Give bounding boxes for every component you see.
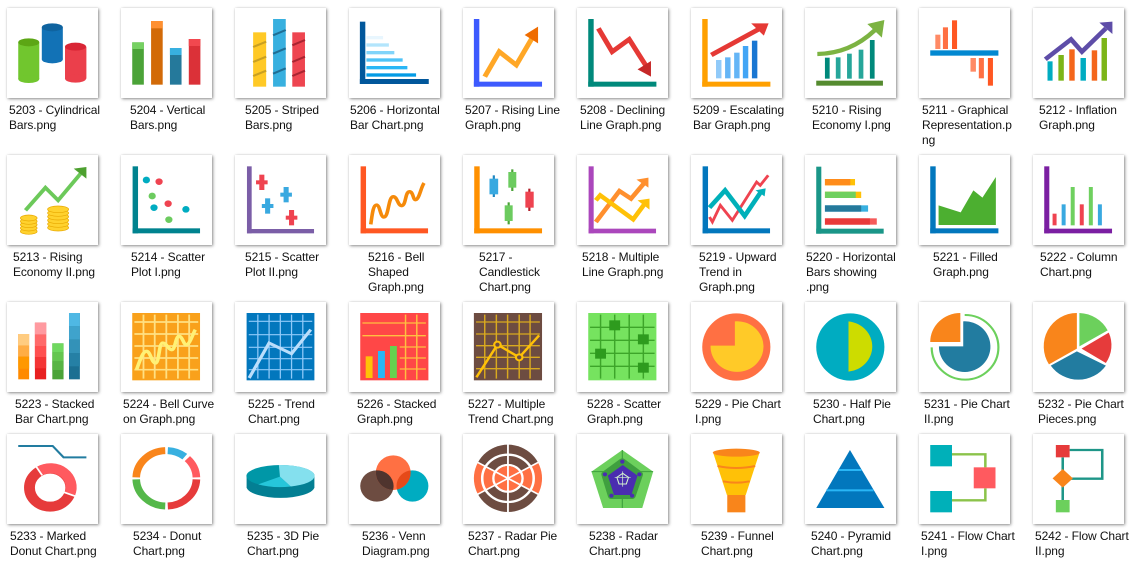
label: 5233: 5233 - Marked (10, 529, 86, 543)
label: 5209: 5209 - Escalating (693, 103, 784, 117)
label: 5231 (924, 397, 1010, 426)
label: 5224 (123, 397, 214, 426)
label: 5205: Bars.png (245, 118, 292, 132)
label: 5205: 5205 - Striped (245, 103, 319, 117)
label: 5204 (130, 103, 205, 132)
label: 5212: Graph.png (1039, 118, 1095, 132)
label: 5239: Chart.png (701, 544, 753, 558)
label: 5214 (131, 250, 205, 279)
label: 5241: I.png (921, 544, 947, 558)
label: 5219: 5219 - Upward (699, 250, 776, 264)
label: 5226: Graph.png (357, 412, 413, 426)
icon: 5242 flow chart II (1033, 434, 1124, 524)
label: 5240: Chart.png (811, 544, 863, 558)
label: 5227 (468, 397, 553, 426)
label: 5206: Bar Chart.png (350, 118, 423, 132)
label: 5226 (357, 397, 436, 426)
label: 5220: .png (806, 280, 829, 294)
icon: 5205 striped bars (235, 8, 326, 98)
label: 5234 (133, 529, 202, 558)
label: 5225 (248, 397, 315, 426)
label: 5204: 5204 - Vertical (130, 103, 205, 117)
label: 5206: 5206 - Horizontal (350, 103, 440, 117)
label: 5218: 5218 - Multiple (582, 250, 659, 264)
label: 5233: Donut Chart.png (10, 544, 97, 558)
label: 5237: 5237 - Radar Pie (468, 529, 557, 543)
icon: 5237 radar pie chart (463, 434, 554, 524)
label: 5234: 5234 - Donut (133, 529, 201, 543)
label: 5231: 5231 - Pie Chart (924, 397, 1010, 411)
icon: 5216 bell shaped graph (349, 155, 440, 245)
label: 5231: II.png (924, 412, 953, 426)
label: 5221: Graph.png (933, 265, 989, 279)
icon: 5218 multiple line graph (577, 155, 668, 245)
icon: 5230 half pie chart (805, 302, 896, 392)
label: 5213: 5213 - Rising (13, 250, 82, 264)
label: 5219: Trend in (699, 265, 742, 279)
icon: 5206 horizontal bar chart (349, 8, 440, 98)
label: 5234: Chart.png (133, 544, 185, 558)
icon: 5222 column chart (1033, 155, 1124, 245)
icon: 5236 venn diagram (349, 434, 440, 524)
label: 5236: 5236 - Venn (362, 529, 426, 543)
label: 5206 (350, 103, 440, 132)
label: 5232 (1038, 397, 1124, 426)
label: 5242: 5242 - Flow Chart (1035, 529, 1129, 543)
label: 5241 (921, 529, 1015, 558)
label: 5216: Graph.png (368, 280, 424, 294)
label: 5207: Graph.png (465, 118, 521, 132)
label: 5236: Diagram.png (362, 544, 430, 558)
label: 5227: 5227 - Multiple (468, 397, 545, 411)
icon: 5229 pie chart I (691, 302, 782, 392)
label: 5232: 5232 - Pie Chart (1038, 397, 1124, 411)
label: 5223 (15, 397, 94, 426)
label: 5228: Graph.png (587, 412, 643, 426)
label: 5203: Bars.png (9, 118, 56, 132)
label: 5227: Trend Chart.png (468, 412, 553, 426)
label: 5220: Bars showing (806, 265, 877, 279)
label: 5212: 5212 - Inflation (1039, 103, 1117, 117)
label: 5207: 5207 - Rising Line (465, 103, 560, 117)
label: 5211: 5211 - Graphical (922, 103, 1008, 117)
label: 5223: 5223 - Stacked (15, 397, 94, 411)
label: 5240 (811, 529, 891, 558)
label: 5211: ng (922, 133, 935, 147)
icon: 5214 scatter plot I (121, 155, 212, 245)
label: 5233 (10, 529, 97, 558)
label: 5239: 5239 - Funnel (701, 529, 774, 543)
label: 5209: Bar Graph.png (693, 118, 770, 132)
label: 5213: Economy II.png (13, 265, 95, 279)
label: 5218 (582, 250, 663, 279)
icon: 5225 trend chart (235, 302, 326, 392)
icon: 5240 pyramid chart (805, 434, 896, 524)
icon: 5217 candlestick chart (463, 155, 554, 245)
label: 5211 (922, 103, 1012, 147)
icon: 5224 bell curve on graph (121, 302, 212, 392)
label: 5230: 5230 - Half Pie (813, 397, 891, 411)
icon: 5238 radar chart (577, 434, 668, 524)
label: 5235 (247, 529, 319, 558)
label: 5228 (587, 397, 661, 426)
label: 5222 (1040, 250, 1117, 279)
label: 5210: 5210 - Rising (812, 103, 881, 117)
label: 5214: Plot I.png (131, 265, 181, 279)
label: 5225: 5225 - Trend (248, 397, 315, 411)
label: 5216 (368, 250, 424, 294)
label: 5241: 5241 - Flow Chart (921, 529, 1015, 543)
label: 5224: 5224 - Bell Curve (123, 397, 214, 411)
label: 5211: Representation.p (922, 118, 1012, 132)
label: 5229: I.png (695, 412, 721, 426)
icon: 5203 cylindrical bars (7, 8, 98, 98)
label: 5235: 5235 - 3D Pie (247, 529, 319, 543)
label: 5225: Chart.png (248, 412, 300, 426)
icon: 5241 flow chart I (919, 434, 1010, 524)
label: 5208: Line Graph.png (580, 118, 661, 132)
icon: 5204 vertical bars (121, 8, 212, 98)
label: 5214: 5214 - Scatter (131, 250, 205, 264)
label: 5236 (362, 529, 430, 558)
icon: 5212 inflation graph (1033, 8, 1124, 98)
label: 5232: Pieces.png (1038, 412, 1096, 426)
icon: 5235 3D pie chart (235, 434, 326, 524)
label: 5217 (479, 250, 540, 294)
label: 5217: Candlestick (479, 265, 540, 279)
label: 5222: 5222 - Column (1040, 250, 1117, 264)
label: 5226: 5226 - Stacked (357, 397, 436, 411)
label: 5238: 5238 - Radar (589, 529, 658, 543)
label: 5212 (1039, 103, 1117, 132)
label: 5217: 5217 - (479, 250, 512, 264)
label: 5215: 5215 - Scatter (245, 250, 319, 264)
label: 5209 (693, 103, 784, 132)
label: 5222: Chart.png (1040, 265, 1092, 279)
label: 5218: Line Graph.png (582, 265, 663, 279)
icon: 5227 multiple trend chart (463, 302, 554, 392)
label: 5229: 5229 - Pie Chart (695, 397, 781, 411)
label: 5204: Bars.png (130, 118, 177, 132)
icon: 5219 upward trend in graph (691, 155, 782, 245)
label: 5216: 5216 - Bell (368, 250, 424, 264)
icon: 5213 rising economy II (7, 155, 98, 245)
icon: 5226 stacked graph (349, 302, 440, 392)
label: 5208: 5208 - Declining (580, 103, 665, 117)
label: 5220 (806, 250, 896, 294)
icon: 5210 rising economy I (805, 8, 896, 98)
label: 5220: 5220 - Horizontal (806, 250, 896, 264)
label: 5235: Chart.png (247, 544, 299, 558)
label: 5237 (468, 529, 557, 558)
label: 5210 (812, 103, 891, 132)
icon: 5232 pie chart pieces (1033, 302, 1124, 392)
label: 5215 (245, 250, 319, 279)
icon: 5228 scatter graph (577, 302, 668, 392)
icon: 5207 rising line graph (463, 8, 554, 98)
label: 5219: Graph.png (699, 280, 755, 294)
label: 5203: 5203 - Cylindrical (9, 103, 100, 117)
label: 5230 (813, 397, 891, 426)
icon: 5211 graphical representation (919, 8, 1010, 98)
label: 5240: 5240 - Pyramid (811, 529, 891, 543)
label: 5242: II.png (1035, 544, 1064, 558)
label: 5224: on Graph.png (123, 412, 195, 426)
icon: 5239 funnel chart (691, 434, 782, 524)
label: 5242 (1035, 529, 1129, 558)
icon: 5220 horizontal bars showing (805, 155, 896, 245)
icon: 5221 filled graph (919, 155, 1010, 245)
label: 5221 (933, 250, 998, 279)
icon: 5208 declining line graph (577, 8, 668, 98)
icon: 5231 pie chart II (919, 302, 1010, 392)
label: 5238: Chart.png (589, 544, 641, 558)
label: 5223: Bar Chart.png (15, 412, 88, 426)
label: 5238 (589, 529, 658, 558)
label: 5207 (465, 103, 560, 132)
label: 5217: Chart.png (479, 280, 531, 294)
label: 5221: 5221 - Filled (933, 250, 998, 264)
label: 5239 (701, 529, 774, 558)
label: 5219 (699, 250, 776, 294)
icon: 5209 escalating bar graph (691, 8, 782, 98)
label: 5215: Plot II.png (245, 265, 298, 279)
icon: 5234 donut chart (121, 434, 212, 524)
icon: 5215 scatter plot II (235, 155, 326, 245)
label: 5208 (580, 103, 665, 132)
label: 5237: Chart.png (468, 544, 520, 558)
label: 5216: Shaped (368, 265, 409, 279)
label: 5228: 5228 - Scatter (587, 397, 661, 411)
label: 5230: Chart.png (813, 412, 865, 426)
label: 5229 (695, 397, 781, 426)
label: 5210: Economy I.png (812, 118, 891, 132)
label: 5213 (13, 250, 95, 279)
label: 5203 (9, 103, 100, 132)
label: 5205 (245, 103, 319, 132)
icon: 5223 stacked bar chart (7, 302, 98, 392)
icon: 5233 marked donut chart (7, 434, 98, 524)
